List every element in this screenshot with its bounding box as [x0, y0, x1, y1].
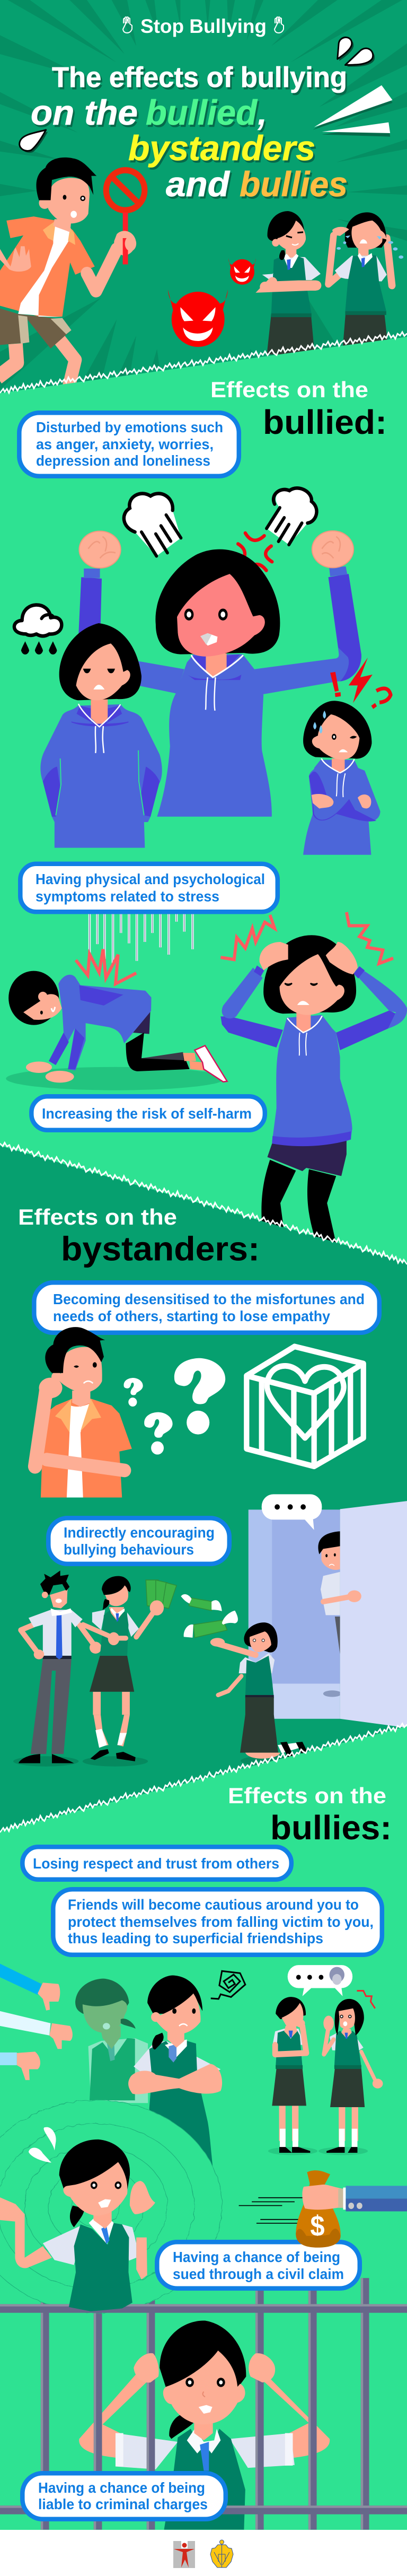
callout: indirectly encouraging — [48, 1518, 229, 1564]
icon: small red devil — [228, 258, 256, 285]
ripple circle background — [0, 2100, 222, 2312]
illustration: hand dropping money bag: $ — [310, 2210, 325, 2242]
title word: bullies: bullies — [240, 164, 348, 204]
prison bars — [41, 2278, 369, 2530]
illustration: main girl losing trust — [128, 1971, 245, 2179]
illustration: smirking schoolgirl — [262, 211, 321, 354]
illustration: sad girl with rain cloud — [14, 605, 162, 848]
background: bystanders section dark green — [0, 1146, 407, 2576]
callout: losing respect — [22, 1847, 291, 1880]
jagged section border 1 — [0, 330, 407, 394]
callout: friends become cautious: thus leading to superficial friendships — [68, 1930, 323, 1946]
title word: bullied: bullied — [146, 93, 258, 132]
heading large: bullied: — [263, 403, 387, 441]
footer band — [0, 2530, 407, 2576]
illustration: hand dropping money bag — [239, 2170, 407, 2248]
decorations: teardrops and white spikes — [20, 37, 393, 153]
illustration: ripple rings — [0, 2100, 222, 2312]
illustration: girl with headache — [220, 912, 407, 1244]
callout: disturbed by emotions: Disturbed by emotions such — [36, 419, 223, 435]
illustration: feet of the gossiping girls — [268, 2129, 368, 2155]
jagged section border 2 — [0, 1140, 407, 1265]
callout: disturbed by emotions: as anger, anxiety, worries, — [36, 436, 214, 452]
logo: yellow hands emblem — [210, 2540, 233, 2568]
illustration: two gossiping schoolgirls — [272, 1965, 383, 2141]
illustration: open doorway and peeking boy — [249, 1494, 407, 1728]
section heading: Effects on the bullies — [228, 1783, 392, 1847]
illustration: jail girl fists — [134, 2353, 275, 2382]
illustration: bullies taking money — [13, 1570, 310, 1767]
callout: risk of self-harm — [31, 1096, 265, 1130]
title comma: , — [257, 93, 267, 132]
icon: left raised hand — [123, 17, 132, 33]
callout: risk of self-harm: Increasing the risk of self-harm — [42, 1105, 252, 1122]
title word: bystanders: bystanders — [128, 128, 315, 168]
callout: desensitised: Becoming desensitised to the misfortunes and — [53, 1291, 365, 1307]
title word: and: and — [166, 164, 231, 204]
title text: Stop Bullying: Stop Bullying — [140, 15, 267, 37]
icon: big red devil — [168, 290, 228, 347]
callout: sued through a civil claim: sued through a civil claim — [173, 2266, 344, 2282]
callout: indirectly encouraging: Indirectly encouraging — [64, 1524, 215, 1541]
main title — [31, 62, 348, 204]
illustration: anxious small girl with bolt — [303, 658, 391, 855]
illustration: confused boy with question marks — [35, 1327, 225, 1497]
callout: physical and psychological symptoms — [20, 864, 278, 912]
heading small: Effects on the — [228, 1783, 386, 1808]
callout: disturbed by emotions — [19, 413, 239, 476]
heading large: bystanders: — [61, 1229, 260, 1268]
illustration: boy with no-bullying sign — [0, 158, 145, 387]
illustration: surprised girl in ripple — [0, 2127, 155, 2311]
background: bullies section light green — [0, 1726, 407, 2576]
callout: physical and psychological symptoms: Having physical and psychological — [36, 871, 265, 887]
section heading: Effects on the bullied — [210, 377, 387, 441]
heading small: Effects on the — [18, 1204, 177, 1229]
callout: friends become cautious: Friends will become cautious around you to — [68, 1897, 359, 1913]
callout: criminal charges: Having a chance of being — [38, 2479, 205, 2496]
illustration: ghosted classmate — [75, 1979, 148, 2103]
heading small: Effects on the — [210, 377, 368, 402]
title line 2 lead: on the — [31, 93, 138, 132]
illustration: spikes falling on crawling girl — [6, 914, 227, 1090]
callout: friends become cautious: protect themselves from falling victim to you, — [68, 1914, 374, 1930]
prison rails — [0, 2304, 407, 2514]
callout: friends become cautious — [53, 1889, 382, 1955]
background: header dark green — [0, 0, 407, 403]
icon: heart locked in cage — [246, 1347, 364, 1466]
illustration: jail girl behind bars — [79, 2320, 330, 2530]
title line 1: The effects of bullying — [52, 62, 347, 93]
header sunburst rays — [0, 0, 407, 390]
callout: desensitised — [34, 1282, 379, 1333]
callout: criminal charges — [22, 2473, 226, 2519]
jagged section border 3 — [0, 1721, 407, 1833]
heading large: bullies: — [270, 1809, 392, 1847]
callout: sued through a civil claim — [157, 2242, 360, 2289]
callout: sued through a civil claim: Having a chance of being — [173, 2249, 340, 2265]
illustration: steam clouds and anger mark — [124, 488, 317, 571]
illustration: crying schoolgirl — [329, 212, 403, 349]
illustration: money bag overlapping callout — [296, 2229, 341, 2248]
callout: desensitised: needs of others, starting to lose empathy — [53, 1308, 331, 1324]
callout: indirectly encouraging: bullying behaviours — [64, 1541, 194, 1558]
illustration: thumbs-down hands — [0, 1964, 73, 2080]
callout: disturbed by emotions: depression and loneliness — [36, 452, 210, 469]
icon: right raised hand — [275, 17, 284, 33]
callout: physical and psychological symptoms: symptoms related to stress — [36, 888, 219, 905]
callout: losing respect: Losing respect and trust from others — [33, 1855, 279, 1872]
heading: Stop Bullying with raised-hand icons — [123, 15, 284, 37]
logo: department emblem with red figure — [173, 2541, 195, 2568]
callout: criminal charges: liable to criminal charges — [38, 2496, 208, 2512]
illustration: angry girl with raised fists — [78, 531, 361, 817]
section heading: Effects on the bystanders — [18, 1204, 260, 1268]
